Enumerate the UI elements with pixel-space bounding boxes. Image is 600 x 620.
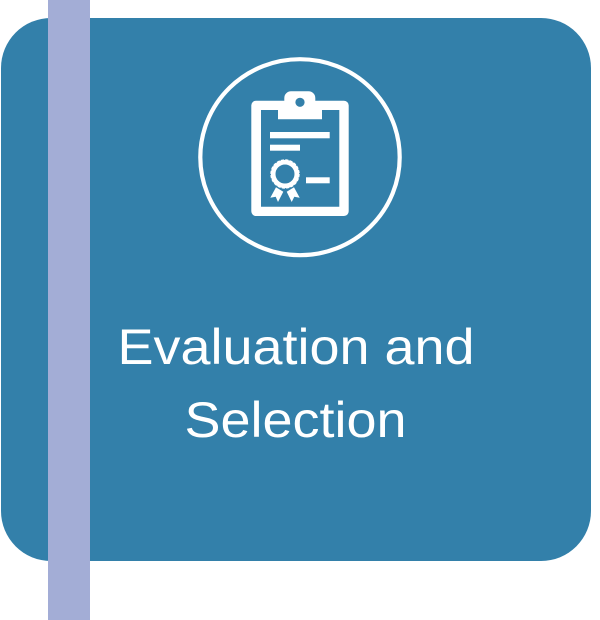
heading: Evaluation and Selection: Selection (184, 392, 406, 448)
icon ring (200, 59, 400, 255)
clipboard board (251, 101, 349, 216)
text lines on the clipboard (270, 132, 330, 183)
clipboard clip (278, 91, 322, 119)
certificate seal with ribbons (270, 161, 300, 202)
icon: clipboard certificate in circle (200, 59, 400, 255)
heading: Evaluation and Selection: Evaluation and (118, 319, 474, 375)
heading: Evaluation and Selection (118, 319, 474, 448)
vertical lavender bar (48, 0, 90, 620)
clip hole (295, 98, 305, 107)
